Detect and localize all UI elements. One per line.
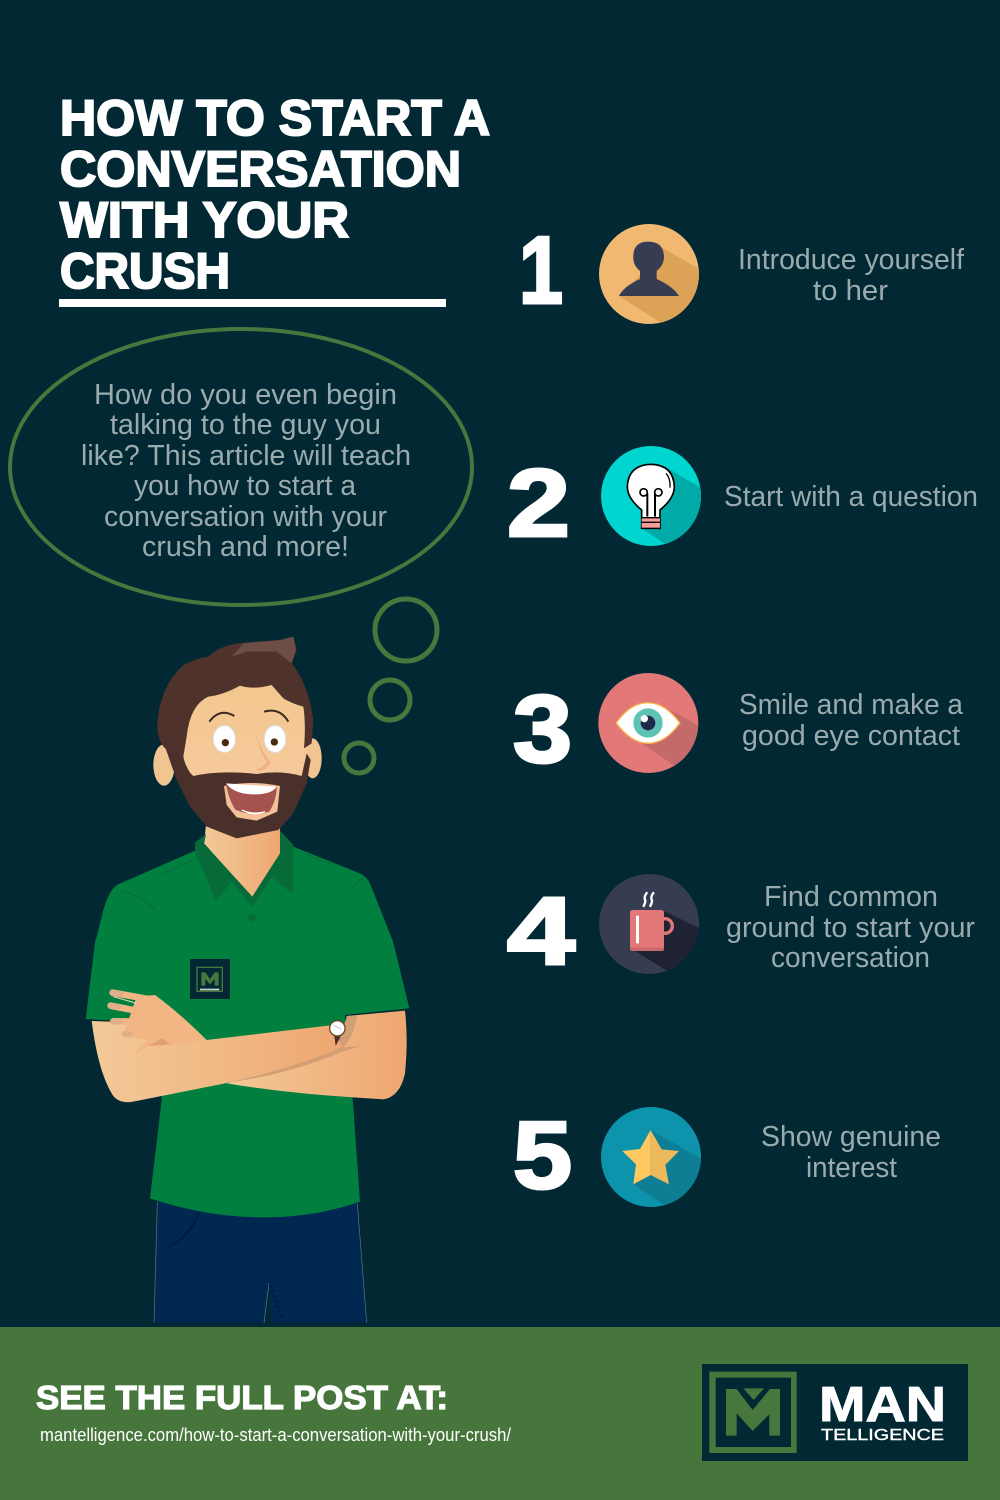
caption	[761, 1121, 941, 1184]
step 5	[513, 1102, 941, 1212]
caption: good eye contact	[742, 720, 960, 752]
thought bubble: conversation with your	[104, 501, 387, 533]
caption: to her	[813, 275, 888, 307]
step 3	[513, 673, 964, 783]
hand	[111, 993, 207, 1055]
caption: interest	[806, 1152, 897, 1184]
watch	[330, 1021, 345, 1046]
thought bubble	[10, 329, 472, 605]
thought circles	[344, 599, 437, 773]
step 1	[522, 224, 964, 324]
logo	[702, 1364, 968, 1461]
icon: light bulb	[601, 446, 701, 546]
beard	[165, 747, 311, 838]
footer band	[0, 1327, 1000, 1500]
thought bubble: like? This article will teach	[81, 440, 411, 472]
title: CRUSH	[60, 243, 230, 299]
caption: Introduce yourself	[738, 244, 965, 276]
caption	[738, 244, 965, 307]
ears	[153, 744, 175, 786]
title	[59, 90, 490, 307]
face	[182, 685, 307, 780]
brows	[209, 711, 288, 722]
thought bubble: you how to start a	[134, 470, 357, 502]
title: CONVERSATION	[60, 141, 461, 197]
caption: ground to start your	[726, 912, 975, 944]
logo: MAN	[819, 1378, 946, 1432]
mouth	[224, 783, 280, 821]
number 3: 3	[513, 676, 572, 783]
caption	[726, 881, 975, 974]
shirt badge	[190, 959, 230, 999]
title: HOW TO START A	[60, 90, 490, 146]
thought bubble: talking to the guy you	[110, 409, 381, 441]
shirt	[96, 847, 393, 941]
icon: eye	[598, 673, 698, 773]
man illustration	[86, 637, 409, 1323]
step 2	[509, 446, 976, 546]
caption: Start with a question	[724, 481, 978, 513]
number 4: 4	[507, 878, 575, 985]
trousers	[154, 1200, 367, 1323]
caption: Find common	[764, 881, 938, 913]
caption: Smile and make a	[739, 689, 964, 721]
footer heading: SEE THE FULL POST AT:	[36, 1379, 448, 1416]
nose	[255, 733, 271, 771]
logo: TELLIGENCE	[821, 1427, 944, 1444]
right arm	[227, 1011, 407, 1099]
icon: star	[601, 1107, 707, 1212]
caption: conversation	[771, 942, 930, 974]
hair	[157, 637, 313, 757]
number 1: 1	[519, 217, 563, 324]
number 2: 2	[507, 450, 570, 557]
step 4	[507, 874, 975, 985]
thought bubble: How do you even begin	[94, 379, 397, 411]
left arm	[92, 1021, 342, 1102]
collar	[195, 834, 252, 907]
head	[153, 637, 322, 907]
eyes	[213, 726, 235, 752]
icon: person	[599, 224, 699, 324]
icon: mug	[599, 874, 699, 974]
caption: Show genuine	[761, 1121, 941, 1153]
thought bubble: crush and more!	[142, 531, 349, 563]
title: WITH YOUR	[60, 192, 349, 248]
footer url: mantelligence.com/how-to-start-a-conversation-with-your-crush/	[40, 1425, 511, 1445]
number 5: 5	[513, 1102, 572, 1209]
caption	[739, 689, 964, 752]
